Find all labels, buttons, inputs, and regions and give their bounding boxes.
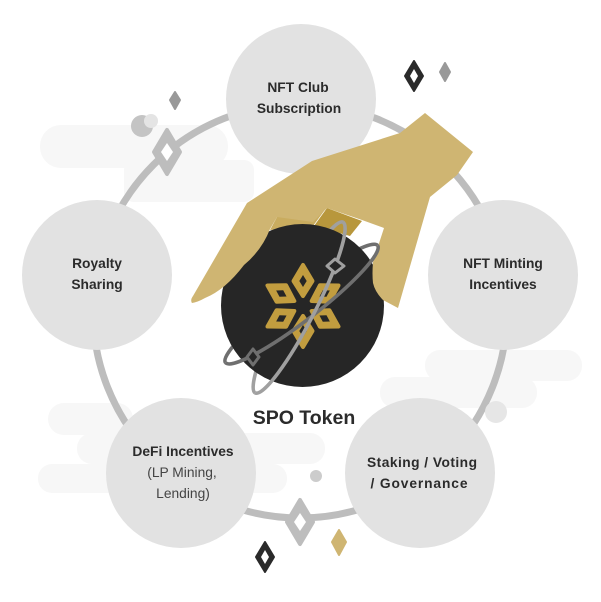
circle: Royalty Sharing (22, 200, 172, 350)
circle: Royalty Sharing: Royalty (72, 256, 122, 271)
orbits: back halves (216, 215, 378, 393)
decorative dot bottom (310, 470, 322, 482)
icon: black diamond upper right (405, 61, 423, 91)
logo: six gold diamonds (263, 265, 343, 347)
ring connecting the use circles (93, 104, 507, 518)
icon: grey diamond upper left (170, 92, 180, 109)
token: black coin (221, 224, 384, 387)
orbit marker: dark diamond (247, 349, 259, 365)
circle: Staking / Voting / Governance: / Governance (370, 476, 468, 491)
circle: NFT Minting Incentives: Incentives (469, 277, 537, 292)
hand (191, 113, 473, 308)
circle: DeFi Incentives: (LP Mining, (147, 465, 217, 480)
circle: Royalty Sharing: Sharing (71, 277, 123, 292)
circle: NFT Minting Incentives: NFT Minting (463, 256, 543, 271)
orbit marker: light diamond (327, 259, 344, 273)
ring diamond: upper left (154, 130, 180, 174)
circle: DeFi Incentives: Lending) (156, 486, 210, 501)
circle: NFT Club Subscription: Subscription (257, 101, 341, 116)
orbits: front halves (225, 222, 387, 400)
circle: DeFi Incentives: DeFi Incentives (132, 444, 234, 459)
circle: Staking / Voting / Governance (345, 398, 495, 548)
icon: grey diamond upper right (440, 63, 450, 81)
circle: NFT Club Subscription: NFT Club (267, 80, 329, 95)
decorative dot right (485, 401, 507, 423)
title: SPO Token: SPO Token (253, 407, 355, 429)
icon: gold diamond bottom (332, 530, 346, 555)
icon: black diamond bottom (256, 542, 274, 572)
circle: DeFi Incentives (106, 398, 256, 548)
decorative dots upper left (131, 114, 158, 137)
hand thumb shading (270, 207, 362, 236)
circle: NFT Minting Incentives (428, 200, 578, 350)
ring diamond: bottom (287, 500, 313, 544)
circle: Staking / Voting / Governance: Staking / Voting (367, 455, 477, 470)
circle: NFT Club Subscription (226, 24, 376, 174)
